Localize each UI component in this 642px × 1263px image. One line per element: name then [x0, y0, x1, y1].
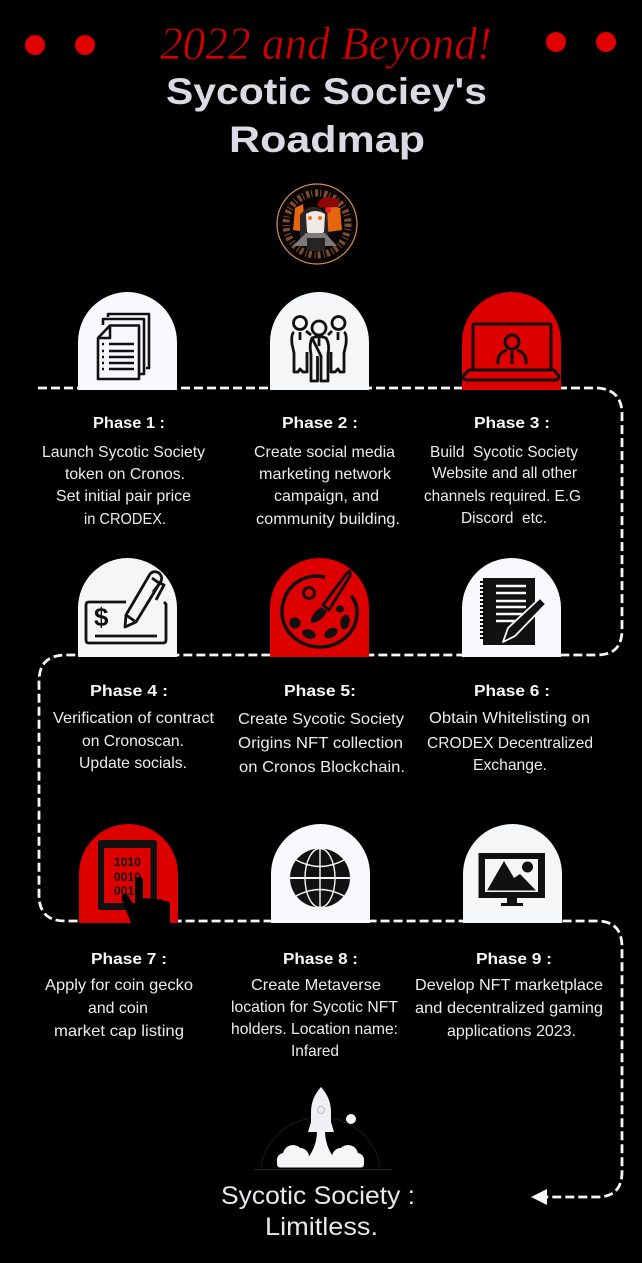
icon: tablet with tapping hand: 1010 — [114, 857, 141, 869]
panel: phase 7 text: and coin — [88, 1000, 148, 1017]
panel: phase 1 text: in CRODEX. — [84, 511, 166, 528]
arrowhead — [531, 1189, 547, 1205]
panel: phase 1 text: Phase 1 : — [93, 415, 165, 432]
panel: phase 8 text: Create Metaverse — [251, 977, 381, 994]
panel: phase 3 text: Discord etc. — [461, 510, 547, 527]
panel: phase 9 icon — [463, 824, 562, 923]
panel: phase 3 icon — [462, 292, 561, 390]
panel: phase 4 text: Phase 4 : — [90, 683, 168, 700]
panel: phase 2 icon — [270, 292, 369, 390]
title — [166, 71, 487, 160]
panel: phase 3 text: channels required. E.G — [424, 488, 581, 505]
panel: phase 3 text: Website and all other — [432, 465, 578, 482]
panel: phase 8 text: Phase 8 : — [283, 951, 358, 968]
dashed roadmap path — [38, 388, 622, 1197]
panel: phase 2 text: Phase 2 : — [282, 415, 358, 432]
icon: laptop with person — [463, 324, 559, 380]
panel: phase 1 text — [42, 415, 205, 528]
script heading: 2022 and Beyond! — [160, 18, 492, 70]
icon: tablet with tapping hand — [98, 840, 170, 923]
decorative dots: top right — [546, 32, 616, 52]
panel: phase 9 text: Phase 9 : — [476, 951, 552, 968]
panel: phase 6 text: Phase 6 : — [474, 683, 550, 700]
panel: phase 5 icon — [270, 558, 369, 657]
panel: phase 9 text: and decentralized gaming — [415, 1000, 603, 1017]
panel: phase 3 text: Phase 3 : — [474, 415, 550, 432]
panel: phase 5 text — [238, 683, 405, 776]
panel: phase 5 text: Create Sycotic Society — [238, 711, 404, 728]
icon: documents — [98, 314, 149, 379]
panel: phase 4 text: on Cronoscan. — [82, 733, 184, 750]
panel: phase 7 icon — [79, 824, 178, 923]
panel: phase 7 text: Phase 7 : — [91, 951, 167, 968]
panel: phase 6 text: Obtain Whitelisting on — [429, 710, 590, 727]
icon: notebook and pencil — [480, 578, 546, 645]
panel: phase 1 text: token on Cronos. — [65, 466, 185, 483]
panel: phase 7 text — [45, 951, 193, 1040]
closing text: Sycotic Society : — [221, 1182, 415, 1210]
panel: phase 8 text: location for Sycotic NFT — [231, 999, 398, 1016]
panel: phase 2 text: marketing network — [259, 466, 392, 483]
panel: phase 9 text: applications 2023. — [447, 1023, 576, 1040]
panel: phase 7 text: Apply for coin gecko — [45, 977, 193, 994]
panel: phase 8 text — [231, 951, 398, 1060]
panel: phase 2 text: community building. — [256, 511, 400, 528]
panel: phase 7 text: market cap listing — [54, 1023, 184, 1040]
title: Roadmap — [229, 119, 425, 160]
panel: phase 6 text: Exchange. — [473, 757, 547, 774]
panel: phase 3 text: Build Sycotic Society — [430, 444, 578, 461]
icon: palette and brush — [282, 571, 357, 647]
panel: phase 2 text: campaign, and — [274, 488, 379, 505]
decorative dots: top left — [25, 35, 95, 55]
icon: rocket launch — [254, 1087, 391, 1170]
panel: phase 5 text: Origins NFT collection — [238, 735, 403, 752]
panel: phase 6 icon — [462, 558, 561, 657]
panel: phase 4 text: Update socials. — [79, 755, 187, 772]
icon: team of people — [292, 316, 346, 381]
icon: cheque and pen: $ — [94, 602, 109, 632]
icon: tablet with tapping hand: 0010 — [114, 886, 141, 898]
panel: phase 8 text: Infared — [291, 1043, 339, 1060]
panel: phase 1 text: Launch Sycotic Society — [42, 444, 205, 461]
panel: phase 6 text: CRODEX Decentralized — [427, 735, 593, 752]
panel: phase 4 text — [53, 683, 215, 772]
panel: phase 6 text — [427, 683, 593, 774]
panel: phase 2 text — [254, 415, 400, 528]
panel: phase 9 text — [415, 951, 603, 1040]
title: Sycotic Sociey's — [166, 71, 487, 112]
panel: phase 9 text: Develop NFT marketplace — [415, 977, 603, 994]
panel: phase 4 text: Verification of contract — [53, 710, 215, 727]
icon: monitor with picture — [478, 853, 545, 906]
panel: phase 5 text: on Cronos Blockchain. — [239, 759, 405, 776]
panel: phase 4 icon — [78, 558, 177, 657]
panel: phase 1 icon — [78, 292, 177, 390]
panel: phase 5 text: Phase 5: — [284, 683, 356, 700]
logo: masked figure coin — [277, 184, 357, 264]
icon: globe — [290, 848, 350, 908]
icon: tablet with tapping hand: 0010 — [114, 872, 141, 884]
closing text — [221, 1182, 415, 1241]
panel: phase 8 icon — [271, 824, 370, 923]
panel: phase 3 text — [424, 415, 581, 527]
panel: phase 1 text: Set initial pair price — [56, 488, 191, 505]
panel: phase 2 text: Create social media — [254, 444, 395, 461]
closing text: Limitless. — [265, 1213, 378, 1241]
panel: phase 8 text: holders. Location name: — [231, 1021, 398, 1038]
